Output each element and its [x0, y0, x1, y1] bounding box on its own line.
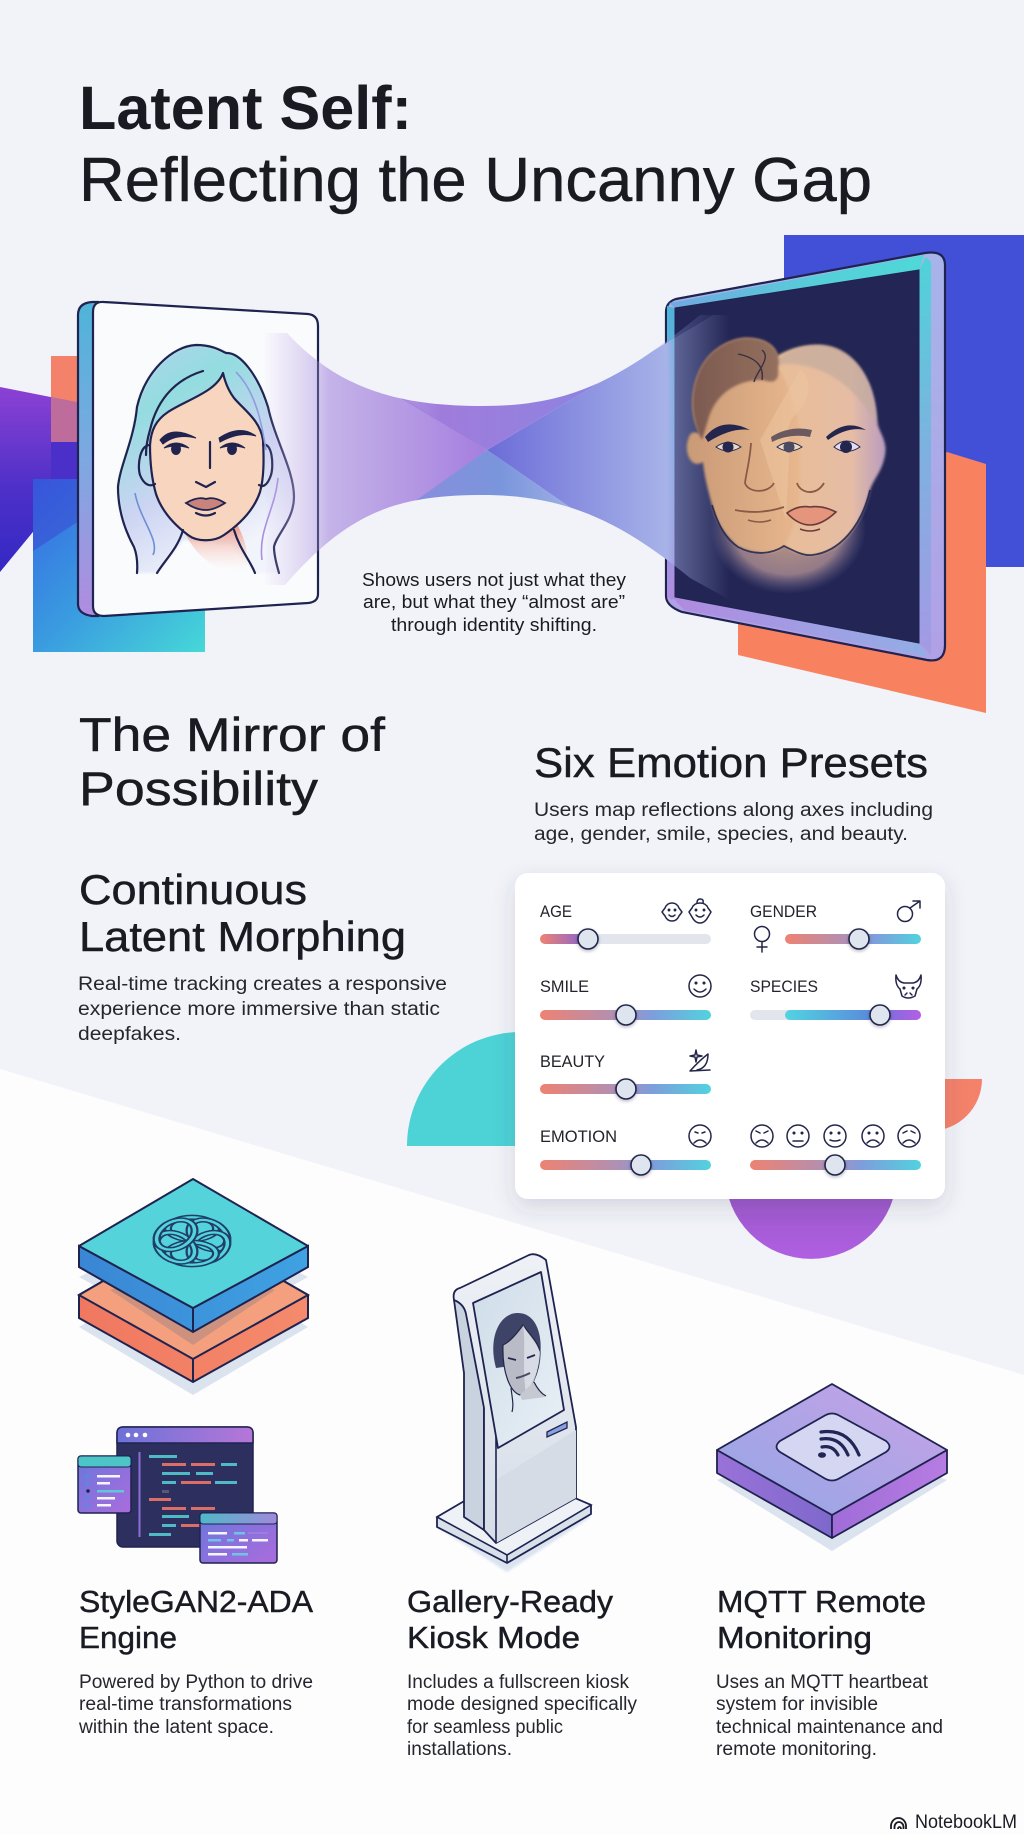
- slider: gender: [750, 901, 921, 952]
- white lower section: [0, 1069, 1024, 1835]
- caption: identity shifting: through identity shifting.: [391, 614, 597, 635]
- slider: beauty: [540, 1050, 711, 1099]
- noses: [745, 443, 774, 491]
- title: Latent Self:: [79, 74, 412, 142]
- column: gallery-ready kiosk mode: Includes a fullscreen kiosk: [407, 1672, 629, 1693]
- kiosk screen: [473, 1272, 564, 1448]
- column: MQTT remote monitoring: Monitoring: [717, 1620, 872, 1655]
- heading: continuous latent morphing: Latent Morphing: [79, 913, 406, 960]
- icon: code windows: [78, 1427, 277, 1563]
- column: gallery-ready kiosk mode: Kiosk Mode: [407, 1620, 580, 1655]
- slider: smile: SMILE: [540, 977, 589, 996]
- panel: emotion sliders: [515, 873, 945, 1199]
- slider: emotion: EMOTION: [540, 1127, 617, 1146]
- portrait: morphing double face: [687, 338, 886, 594]
- icon: MQTT router: [717, 1384, 947, 1551]
- kiosk body: [454, 1300, 484, 1530]
- column: StyleGAN2-ADA engine: StyleGAN2-ADA: [79, 1584, 313, 1619]
- title: [79, 74, 872, 215]
- NotebookLM logo: NotebookLM: [915, 1812, 1017, 1833]
- slider: species: SPECIES: [750, 977, 818, 996]
- eyes: [716, 442, 741, 451]
- heading: the mirror of possibility: The Mirror of: [79, 708, 386, 761]
- column: MQTT remote monitoring: remote monitoring.: [716, 1739, 877, 1760]
- column: StyleGAN2-ADA engine: Engine: [79, 1620, 177, 1655]
- slider: age: AGE: [540, 902, 572, 921]
- column: MQTT remote monitoring: system for invisible: [716, 1694, 878, 1715]
- column: MQTT remote monitoring: technical maintenance and: [716, 1717, 943, 1738]
- heading: the mirror of possibility: [79, 708, 386, 815]
- column: MQTT remote monitoring: Uses an MQTT heartbeat: [716, 1672, 929, 1693]
- portrait: original face: [118, 345, 294, 573]
- male head: [687, 338, 800, 552]
- column: gallery-ready kiosk mode: Gallery-Ready: [407, 1584, 614, 1619]
- icon: stacked latent layers: [79, 1179, 308, 1395]
- decoration: left shapes: [0, 356, 205, 652]
- main window: [117, 1427, 253, 1547]
- slider: smile: [540, 975, 711, 1025]
- column: MQTT remote monitoring: MQTT Remote: [717, 1584, 926, 1619]
- column: gallery-ready kiosk mode: [407, 1584, 638, 1760]
- caption: identity shifting: [362, 569, 627, 635]
- icon: knot logo: [149, 1215, 235, 1267]
- heading: six emotion presets: Six Emotion Presets: [534, 739, 928, 786]
- right monitor: [666, 252, 945, 660]
- decoration: circles behind slider panel: [407, 1032, 982, 1259]
- column: StyleGAN2-ADA engine: within the latent space.: [78, 1717, 274, 1738]
- left mirror panel: [78, 302, 318, 616]
- right window: [200, 1513, 277, 1563]
- screen: [675, 270, 919, 643]
- slider: beauty: BEAUTY: [540, 1052, 605, 1071]
- text: axes description: Users map reflections along axes including: [534, 800, 933, 821]
- kiosk base: [437, 1472, 591, 1563]
- column: gallery-ready kiosk mode: mode designed specifically: [407, 1694, 638, 1715]
- column: gallery-ready kiosk mode: for seamless public: [407, 1717, 563, 1738]
- female head: [770, 345, 886, 555]
- text: axes description: age, gender, smile, species, and beauty.: [534, 824, 908, 845]
- text: real-time tracking: Real-time tracking creates a responsive: [78, 974, 447, 995]
- slider: emotion: [540, 1125, 711, 1175]
- title: Reflecting the Uncanny Gap: [79, 146, 872, 215]
- decoration: right shapes: [738, 235, 1024, 713]
- light ribbon: morph transformation: [260, 300, 730, 600]
- caption: identity shifting: are, but what they “almost are”: [363, 591, 625, 612]
- slider: age: [540, 899, 711, 949]
- slider: emotion presets: [750, 1125, 921, 1175]
- mouths: [735, 507, 784, 512]
- icon: gallery kiosk: [437, 1254, 591, 1572]
- slider: species: [750, 975, 921, 1025]
- text: real-time tracking: [78, 974, 447, 1045]
- column: StyleGAN2-ADA engine: Powered by Python to drive: [79, 1672, 313, 1693]
- column: gallery-ready kiosk mode: installations.: [407, 1739, 512, 1760]
- left window: [78, 1456, 131, 1513]
- brows: [705, 424, 750, 442]
- text: real-time tracking: experience more immersive than static: [78, 999, 440, 1020]
- column: StyleGAN2-ADA engine: real-time transformations: [79, 1694, 292, 1715]
- text: real-time tracking: deepfakes.: [78, 1024, 181, 1045]
- slider: gender: GENDER: [750, 902, 817, 921]
- heading: continuous latent morphing: [79, 866, 406, 960]
- text: axes description: [534, 800, 933, 845]
- column: MQTT remote monitoring: [716, 1584, 943, 1760]
- column: StyleGAN2-ADA engine: [78, 1584, 313, 1738]
- heading: the mirror of possibility: Possibility: [79, 762, 319, 815]
- heading: continuous latent morphing: Continuous: [79, 866, 307, 913]
- caption: identity shifting: Shows users not just what they: [362, 569, 627, 590]
- neck fading into the screen: [714, 518, 863, 592]
- kiosk face: [493, 1313, 546, 1412]
